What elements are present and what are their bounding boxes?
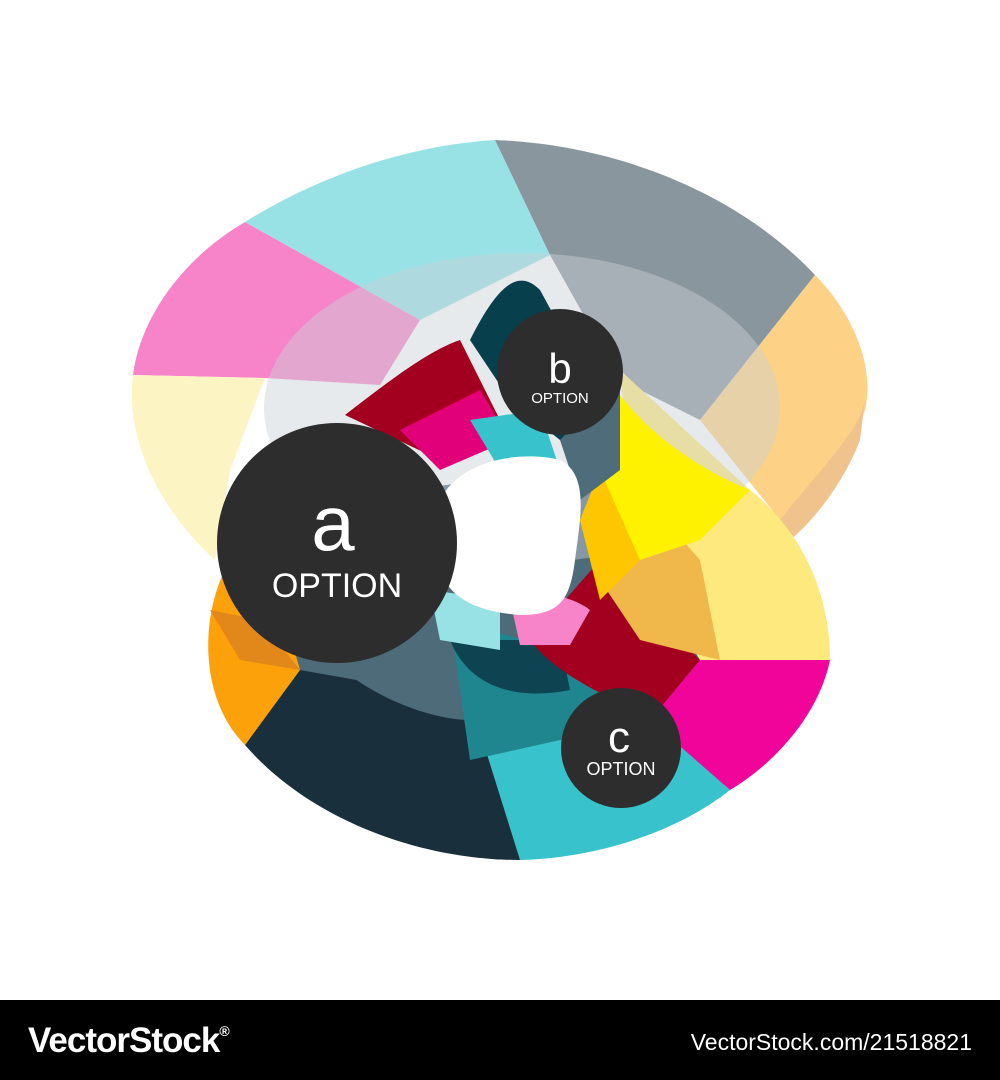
center hole	[440, 456, 581, 615]
inner translucent ring	[210, 253, 780, 760]
footer bar	[0, 1000, 1000, 1080]
option c circle: OPTION	[586, 759, 656, 779]
footer bar: VectorStock.com/21518821	[691, 1029, 972, 1055]
option b circle	[497, 309, 623, 435]
option b circle: b	[548, 345, 572, 392]
footer bar: ®	[219, 1023, 230, 1039]
outer ring segments	[132, 140, 868, 860]
option a circle: a	[311, 479, 355, 567]
base of lower lobe	[235, 480, 815, 845]
option a circle	[217, 423, 457, 663]
option a circle: OPTION	[272, 567, 402, 605]
footer bar: VectorStock	[28, 1021, 219, 1060]
option c circle	[561, 688, 681, 808]
option b circle: OPTION	[531, 390, 589, 407]
option c circle: c	[608, 713, 630, 762]
